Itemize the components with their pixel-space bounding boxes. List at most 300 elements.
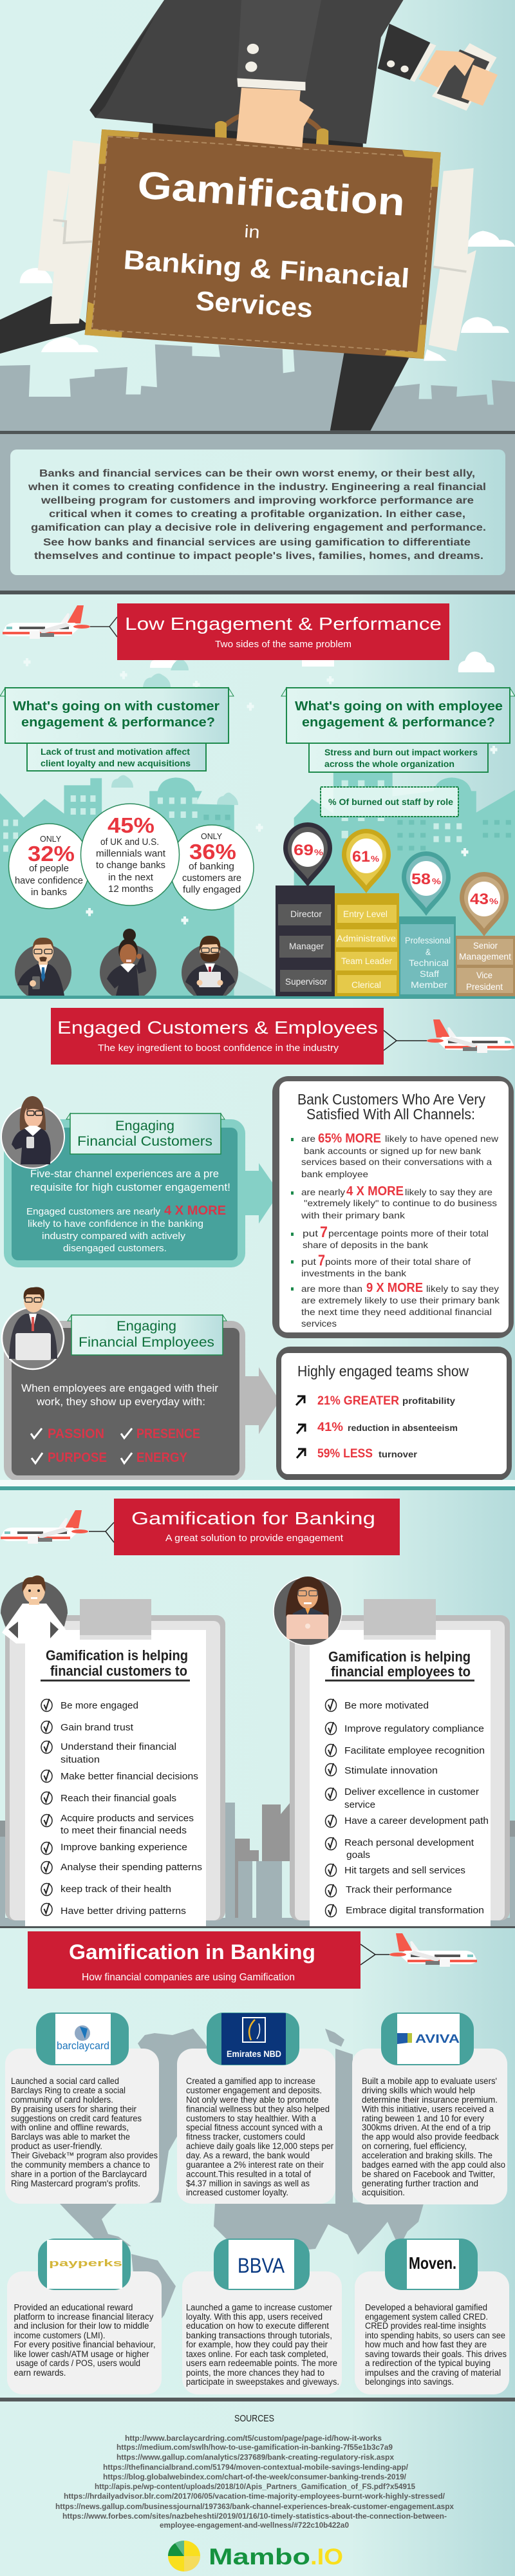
background: hero sky <box>0 0 515 451</box>
bar: professional 58%: Professional <box>405 935 451 945</box>
panel: engaging customers: industry compared with actively <box>42 1231 186 1242</box>
card: Aviva: 300kms driven. At the end of a trip <box>362 2123 491 2132</box>
card: PayPerks: earn rewards. <box>14 2368 66 2378</box>
panel: bank customers satisfied: investments in the bank <box>301 1268 407 1278</box>
panel: highly engaged teams: 21% GREATER <box>317 1394 399 1408</box>
bar: directors 69%: Manager <box>289 941 324 951</box>
card: Aviva: With this initiative, users received a <box>362 2105 494 2114</box>
card: Emirates NBD: customers to stay healthier. With a <box>186 2114 316 2123</box>
logo: Barclaycard <box>36 2012 129 2065</box>
card: BBVA: taxes online. For each task completed, <box>186 2349 328 2359</box>
card: Barclaycard: with online and offline rewards, <box>10 2123 129 2132</box>
person: bearded man with tablet <box>182 936 238 1001</box>
bar: senior 43%: Management <box>459 951 511 961</box>
clipboard: employees: Deliver excellence in customer <box>344 1786 479 1797</box>
card: Emirates NBD: increased customer loyalty. <box>186 2188 288 2197</box>
title box: engaging financial employees: Engaging <box>117 1319 176 1334</box>
panel: bank customers satisfied: are <box>301 1133 315 1144</box>
card: Moven <box>355 2271 509 2394</box>
title on briefcase: Services <box>195 285 314 323</box>
card: Barclaycard: product as user-friendly. <box>11 2141 102 2151</box>
intro text panel: critical when it comes to creating a profitable organization. In either case, <box>49 509 465 520</box>
card: Moven: Developed a behavioral gamified <box>365 2303 487 2312</box>
card: Aviva: acquisition. <box>362 2188 405 2197</box>
heading: Gamification in Banking <box>28 1931 360 1989</box>
card: PayPerks: usage of cards / POS, users would <box>16 2358 140 2368</box>
sources background <box>0 2401 515 2576</box>
card: Moven: how much and how fast they are <box>365 2340 487 2349</box>
clipboard: customers: situation <box>61 1754 100 1765</box>
panel: bank customers satisfied: likely to have opened new <box>385 1133 499 1144</box>
card: BBVA: for example, how they could pay their <box>186 2340 328 2349</box>
stat bubble: 45% <box>81 804 179 905</box>
clipboard: customers: keep track of their health <box>61 1884 171 1895</box>
card: PayPerks: like lower cash/ATM usage or higher <box>14 2349 149 2359</box>
clipboard: employees: Be more motivated <box>344 1700 429 1711</box>
card: BBVA: banking transactions through tutorials, <box>186 2331 332 2340</box>
card: PayPerks <box>7 2271 162 2394</box>
divider line <box>0 591 515 594</box>
heading: Engaged Customers & Employees <box>51 1008 384 1065</box>
panel: bank customers satisfied: the next time they need additional financial <box>301 1307 492 1317</box>
logo: PayPerks <box>38 2239 131 2290</box>
card: PayPerks: For every positive financial behaviour, <box>14 2340 156 2349</box>
pin: 58% <box>402 851 451 916</box>
callout: burned out label <box>321 787 458 817</box>
title box: engaging financial employees: Financial Employees <box>79 1335 214 1350</box>
airplane 2 <box>427 1019 514 1053</box>
panel: engaging employees: work, they show up everyday with: <box>36 1396 205 1408</box>
logo: BBVA <box>214 2239 310 2290</box>
panel: employee question: What's going on with employee <box>295 699 503 714</box>
bar: directors 69%: Supervisor <box>285 976 327 987</box>
heading: Gamification in Banking: Gamification in Banking <box>69 1940 315 1964</box>
bar: directors 69% <box>276 886 335 996</box>
panel: highly engaged teams: reduction in absenteeism <box>348 1423 458 1433</box>
background city section 3 <box>0 1803 515 1926</box>
card: Barclaycard: suggestions on credit card features <box>11 2114 142 2123</box>
stat bubble: 32% <box>9 824 90 909</box>
panel: highly engaged teams: 59% LESS <box>317 1447 373 1461</box>
sources list: https://medium.com/swlh/how-to-use-gamification-in-banking-7f55e1b3c7a9 <box>117 2443 393 2452</box>
panel: bank customers satisfied: with their primary bank <box>301 1210 406 1220</box>
logo: Emirates NBD: Emirates NBD <box>227 2049 281 2059</box>
pin: 43%: % <box>489 896 499 906</box>
stat bubble: 45%: in the next <box>108 872 154 883</box>
pin: 69%: 69 <box>294 842 314 859</box>
divider line <box>0 2398 515 2401</box>
title on briefcase <box>122 163 411 323</box>
title on briefcase: in <box>244 222 261 242</box>
card: BBVA: points, the more chances they had to <box>186 2368 324 2378</box>
title box: engaging financial customers: Financial Customers <box>77 1134 212 1149</box>
heading: Gamification for Banking <box>114 1499 400 1555</box>
title on briefcase: Banking & Financial <box>122 244 411 294</box>
section 1 background <box>0 594 515 999</box>
card: Emirates NBD: financial wellness but they also helped <box>186 2105 330 2114</box>
section 2 background <box>0 999 515 1480</box>
card: Aviva: generating further traction and <box>362 2179 478 2188</box>
card: Aviva: determine their insurance premium. <box>362 2095 498 2105</box>
bar: staff 61%: Clerical <box>351 980 381 990</box>
card: Aviva: badges earned with the app could also <box>362 2160 505 2170</box>
stat bubble: 36%: of banking <box>189 861 234 872</box>
panel: highly engaged teams: turnover <box>379 1449 418 1459</box>
card: Barclaycard: community of card holders. <box>11 2095 113 2105</box>
panel: bank customers satisfied: 9 X MORE <box>366 1281 423 1295</box>
bar: directors 69%: Director <box>290 909 322 919</box>
card: Moven: engagement system called CRED. <box>365 2312 488 2322</box>
logo: Mambo.IO: .IO <box>310 2544 343 2570</box>
sources heading: SOURCES <box>234 2413 274 2424</box>
sources list: http://www.barclaycardring.com/t5/custom/page/page-id/how-it-works <box>125 2434 382 2443</box>
pin: 58%: 58 <box>411 871 431 888</box>
section 3 background <box>0 1490 515 1928</box>
logo: BBVA: BBVA <box>238 2254 285 2277</box>
card: Emirates NBD: achieve daily goals like 12,000 steps per <box>186 2141 333 2151</box>
ground line 3 <box>0 1926 515 1928</box>
card: Emirates NBD: account.This resulted in a total of <box>186 2169 311 2179</box>
panel: bank customers satisfied: 4 X MORE <box>346 1184 404 1198</box>
pin: 69% <box>283 822 332 887</box>
heading: Engaged Customers & Employees: Engaged Customers & Employees <box>57 1018 378 1037</box>
airplane 1 <box>3 605 90 639</box>
heading: Low Engagement & Performance: Low Engagement & Performance <box>125 614 442 634</box>
person: man with phone <box>15 938 71 1001</box>
sources list: https://thefinancialbrand.com/51794/moven-contextual-mobile-savings-lending-app/ <box>103 2463 409 2472</box>
clipboard: employees: Gamification is helping <box>328 1649 471 1665</box>
subheading: stress: Stress and burn out impact workers <box>324 748 478 757</box>
stat bubble: 32%: in banks <box>31 887 67 898</box>
bar: professional 58%: Staff <box>420 969 439 979</box>
teal divider <box>0 1486 515 1490</box>
avatar: woman with laptop <box>274 1577 342 1645</box>
panel: engaging employees: PASSION <box>48 1426 104 1441</box>
stat bubble: 45%: of UK and U.S. <box>100 837 159 848</box>
title box: engaging financial customers: Engaging <box>115 1119 174 1133</box>
panel: engaging customers: 4 X MORE <box>164 1204 226 1218</box>
ground band <box>0 996 515 999</box>
clipboard: customers: Improve banking experience <box>61 1842 187 1853</box>
card: Emirates NBD: Not only were they able to promote <box>186 2095 319 2105</box>
card: Barclaycard <box>5 2049 159 2204</box>
panel: bank customers satisfied: put <box>301 1256 316 1267</box>
heading: Gamification in Banking: How financial companies are using Gamification <box>82 1972 295 1983</box>
clipboard: employees: Facilitate employee recognition <box>344 1745 485 1756</box>
subheading: trust: client loyalty and new acquisitions <box>41 759 191 768</box>
panel: bank customers satisfied: are more than <box>301 1283 362 1294</box>
panel: bank customers satisfied: "extremely likely" to continue to do business <box>304 1198 497 1208</box>
panel: bank customers satisfied: Satisfied With All Channels: <box>306 1106 475 1122</box>
clipboard: customers: Gamification is helping <box>46 1647 188 1663</box>
panel: engaging customers: disengaged customers. <box>63 1243 167 1254</box>
avatar: man in white shirt <box>1 1575 68 1643</box>
panel: bank customers satisfied: services <box>301 1318 337 1329</box>
callout: burned out label: % Of burned out staff by role <box>328 797 453 807</box>
clipboard: employees: Hit targets and sell services <box>344 1865 465 1876</box>
bar: professional 58%: Member <box>411 980 447 990</box>
bar: professional 58%: & <box>426 947 431 957</box>
sources list: https://www.forbes.com/sites/nazbeheshti/2019/01/16/10-timely-statistics-about-the-connection-between- <box>62 2512 447 2521</box>
card: Aviva: driving skills which would help <box>362 2085 475 2096</box>
card: Barclaycard: Ring Mastercard program's profits. <box>11 2179 140 2188</box>
card: Aviva: be shared on Facebook and Twitter, <box>362 2169 495 2179</box>
clipboard: employees: Track their performance <box>346 1884 452 1895</box>
stat bubble: 45%: to change banks <box>96 860 165 871</box>
sources list <box>55 2434 454 2530</box>
card: BBVA <box>182 2271 342 2394</box>
stat bubble: 45%: 45% <box>108 813 154 837</box>
pin: 61% <box>342 829 391 893</box>
bar: professional 58% <box>399 916 456 996</box>
panel: employee question: engagement & performance? <box>302 715 495 730</box>
clipboard: employees: Stimulate innovation <box>344 1765 438 1776</box>
heading: Low Engagement & Performance: Two sides of the same problem <box>215 639 351 650</box>
logo: Aviva <box>381 2012 474 2065</box>
card: Emirates NBD: fitness tracker, customers could <box>186 2132 305 2142</box>
bar: senior 43%: President <box>466 981 503 992</box>
logo: Moven: Moven. <box>409 2253 456 2273</box>
bar: senior 43%: Vice <box>476 970 492 980</box>
intro text panel: Banks and financial services can be their own worst enemy, or their best ally, <box>39 468 475 479</box>
clipboard: customers: financial customers to <box>50 1663 187 1679</box>
card: Barclaycard: Launched a social card called <box>11 2076 119 2086</box>
pin: 43% <box>460 872 509 936</box>
panel: highly engaged teams: Highly engaged teams show <box>297 1363 469 1379</box>
stat bubble: 32%: ONLY <box>40 834 61 844</box>
bar: staff 61%: Entry Level <box>343 909 388 919</box>
bar: senior 43% <box>456 936 515 996</box>
bar: professional 58%: Technical <box>409 958 449 968</box>
clipboard: customers: Be more engaged <box>61 1700 138 1711</box>
section 4 background <box>0 1928 515 2398</box>
panel: bank customers satisfied: points more of their total share of <box>325 1256 471 1267</box>
logo: Mambo.IO: Mambo <box>209 2544 310 2570</box>
sources list: https://news.gallup.com/businessjournal/197363/bank-channel-experiences-break-customer-engagement.aspx <box>55 2502 454 2511</box>
subheading: stress: across the whole organization <box>324 759 454 769</box>
clipboard: customers: Understand their financial <box>61 1741 176 1752</box>
panel: highly engaged teams: profitability <box>402 1396 455 1406</box>
airplane 3 <box>1 1510 88 1544</box>
sources list: https://www.gallup.com/analytics/237689/bank-creating-regulatory-risk.aspx <box>117 2452 394 2461</box>
card: Moven: CRED provides real-time insights <box>365 2321 486 2331</box>
sources list: https://hrdailyadvisor.blr.com/2017/06/05/vacation-time-majority-employees-burnt-work-highly-stressed/ <box>64 2492 445 2501</box>
panel: engaging customers: Five-star channel experiences are a pre <box>30 1168 219 1180</box>
clipboard: customers: Have better driving patterns <box>61 1906 186 1917</box>
panel: bank customers satisfied: likely to say they are <box>405 1187 492 1197</box>
title on briefcase: Gamification <box>136 163 406 224</box>
panel: bank customers satisfied: Bank Customers Who Are Very <box>297 1091 485 1108</box>
avatar: woman customer <box>1 1096 64 1168</box>
heading: Engaged Customers & Employees: The key ingredient to boost confidence in the industry <box>98 1043 339 1054</box>
clipboard: customers: Reach their financial goals <box>61 1793 176 1804</box>
intro text panel: themselves and continue to impact people's lives, families, homes, and dreams. <box>34 551 483 562</box>
card: Aviva: rating beween 1 and 10 for every <box>362 2114 484 2123</box>
card: Barclaycard: By praising users for sharing their <box>11 2105 136 2114</box>
clipboard: customers: Gain brand trust <box>61 1722 134 1733</box>
logo: Emirates NBD <box>207 2012 299 2065</box>
card: Aviva: Built a mobile app to evaluate users' <box>362 2076 497 2086</box>
connector 2 <box>384 1030 427 1050</box>
sparkles over city <box>86 746 497 925</box>
pin: 58%: % <box>432 876 442 886</box>
panel: bank customers satisfied: 7 <box>320 1224 328 1241</box>
panel: bank customers satisfied: share of deposits in the bank <box>303 1240 429 1250</box>
clipboard: employees: Embrace digital transformation <box>346 1905 484 1916</box>
panel: highly engaged teams <box>276 1347 512 1481</box>
card: Emirates NBD: special fitness account synced with a <box>186 2123 323 2132</box>
card: BBVA: education on how to execute different <box>186 2321 329 2331</box>
pin: 61%: % <box>371 854 379 864</box>
panel: customer question: What's going on with customer <box>13 699 220 714</box>
stat bubble: 45%: 12 months <box>108 884 153 895</box>
sources list: employee-engagement-and-wellness/#722c10b422a0 <box>160 2521 349 2530</box>
sources list: http://apis.pe/wp-content/uploads/2018/10/Apis_Partners_Gamification_of_FS.pdf?x54915 <box>95 2482 415 2491</box>
card: Emirates NBD <box>177 2049 335 2204</box>
panel: bank customers satisfied: bank accounts or signed up for new bank <box>304 1146 482 1156</box>
clipboard: employees: goals <box>346 1850 370 1861</box>
card: Moven: into spending habits, so users can see <box>365 2331 505 2340</box>
clipboard: customers: Analyse their spending patterns <box>61 1862 202 1873</box>
card: Emirates NBD: customer engagement and deposits. <box>186 2085 322 2096</box>
card: PayPerks: Provided an educational reward <box>14 2303 133 2312</box>
panel: engaging employees: When employees are engaged with their <box>21 1383 219 1394</box>
clipboard: employees: Improve regulatory compliance <box>344 1723 484 1734</box>
panel: engaging employees: ENERGY <box>136 1450 187 1465</box>
panel: engaging employees <box>4 1321 279 1481</box>
clipboard: employees: Reach personal development <box>344 1837 474 1848</box>
heading: Gamification for Banking: A great solution to provide engagement <box>165 1533 344 1544</box>
hero illustration: businessman with briefcase <box>0 0 515 434</box>
panel: employee question <box>281 688 515 743</box>
intro text panel: when it comes to creating confidence in the industry. Engineering a real financial <box>28 482 486 493</box>
title box: engaging financial customers <box>66 1113 225 1154</box>
panel: engaging customers: Engaged customers are nearly <box>26 1206 161 1217</box>
connector 1 <box>90 617 117 637</box>
heading: Low Engagement & Performance <box>117 603 449 660</box>
panel: bank customers satisfied: are nearly <box>301 1187 345 1197</box>
logo: Barclaycard: barclaycard <box>57 2040 109 2052</box>
card: BBVA: Launched a game to increase customer <box>186 2303 332 2312</box>
card: Barclaycard: share in a portion of the Barclaycard <box>11 2169 147 2179</box>
sources list: https://blog.globalwebindex.com/chart-of-the-week/consumer-banking-trends-2019/ <box>103 2472 407 2481</box>
heading: Gamification for Banking: Gamification for Banking <box>131 1508 375 1528</box>
panel: bank customers satisfied: are extremely likely to use their primary bank <box>301 1295 500 1305</box>
logo: Aviva: AVIVA <box>415 2032 460 2045</box>
panel: customer question <box>0 688 234 743</box>
card: Aviva: acceleration and braking skills. The <box>362 2151 492 2160</box>
intro text panel: See how banks and financial services are using gamification to differentiate <box>43 537 471 548</box>
panel: customer question: engagement & performance? <box>21 715 215 730</box>
panel: bank customers satisfied: likely to say they <box>426 1283 499 1294</box>
card: Moven: saving towards their goals. This drives <box>365 2349 507 2359</box>
bar: senior 43%: Senior <box>473 940 498 951</box>
city background left <box>0 777 276 996</box>
world map <box>60 2029 424 2331</box>
pin: 43%: 43 <box>470 891 489 908</box>
card: BBVA: loyalty. With this app, users received <box>186 2312 323 2322</box>
panel: bank customers satisfied: percentage points more of their total <box>328 1228 489 1238</box>
clipboard: employees: Have a career development path <box>344 1815 489 1826</box>
panel: bank customers satisfied: 65% MORE <box>318 1132 381 1146</box>
stat bubble: 45%: millennials want <box>96 848 166 859</box>
panel: engaging customers <box>4 1119 279 1267</box>
panel: engaging customers: likely to have confidence in the banking <box>28 1218 203 1229</box>
ground line <box>0 431 515 434</box>
card: Emirates NBD: day. As a reward, the bank would <box>186 2151 310 2160</box>
panel: engaging customers: requisite for high customer engagement! <box>30 1182 230 1193</box>
card: PayPerks: platform to increase financial literacy <box>14 2312 154 2322</box>
card: Aviva: the app would also provide feedback <box>362 2132 499 2142</box>
card: Aviva: on cornering, fuel efficiency, <box>362 2141 467 2151</box>
card: Barclaycard: Barclays Ring to create a social <box>11 2085 126 2096</box>
card: Moven: belongings into savings. <box>365 2377 454 2387</box>
connector 3 <box>89 1522 114 1542</box>
logo: PayPerks: payperks <box>49 2258 122 2269</box>
clipboard: employees: financial employees to <box>331 1663 471 1680</box>
title box: engaging financial employees <box>68 1315 227 1355</box>
panel: bank customers satisfied: services based on their conversations with a <box>301 1157 492 1167</box>
clipboard: customers: to meet their financial needs <box>61 1825 187 1836</box>
intro text panel <box>10 450 505 575</box>
card: PayPerks: and inclusion for their low to middle <box>14 2321 149 2331</box>
card: Emirates NBD: $4.37 million in savings as well as <box>186 2179 310 2188</box>
intro text panel: gamification can play a decisive role in delivering engagement and performance. <box>31 522 486 533</box>
card: Moven: a redirection of the typical buying <box>365 2358 491 2368</box>
stat bubble: 32%: 32% <box>28 842 75 866</box>
connector 4 <box>360 1944 389 1965</box>
bar: staff 61% <box>335 893 399 996</box>
stat bubble: 36%: customers are <box>182 873 241 884</box>
stat bubble: 36%: fully engaged <box>183 884 241 895</box>
stat bubble: 32%: have confidence <box>15 875 83 886</box>
stat bubble: 32%: of people <box>29 863 69 874</box>
clipboard: customers: Acquire products and services <box>61 1813 194 1824</box>
panel: highly engaged teams: 41% <box>317 1421 343 1434</box>
intro text panel: wellbeing program for customers and improving workforce performance are <box>41 495 474 506</box>
panel: bank customers satisfied <box>272 1076 514 1338</box>
card: Barclaycard: Barclays was able to market the <box>11 2132 130 2142</box>
city background right <box>294 773 515 996</box>
card: PayPerks: income customers (LMI). <box>14 2331 106 2340</box>
clipboard: customers: Make better financial decisions <box>61 1771 198 1782</box>
band between sections <box>0 1480 515 1486</box>
clipboard: employees <box>290 1599 510 1926</box>
card: Emirates NBD: Created a gamified app to increase <box>186 2076 315 2086</box>
subheading: trust: Lack of trust and motivation affect <box>41 747 191 757</box>
intro background band <box>0 434 515 591</box>
panel: bank customers satisfied: put <box>303 1228 318 1238</box>
person: woman with phone <box>100 929 156 1001</box>
panel: bank customers satisfied: bank employee <box>301 1169 368 1179</box>
clipboard: employees: service <box>344 1799 375 1810</box>
subheading: stress <box>309 743 488 772</box>
clipboard: customers <box>5 1599 225 1926</box>
subheading: trust <box>27 743 206 771</box>
panel: bank customers satisfied: 7 <box>318 1252 325 1269</box>
card: Barclaycard: the community members a chance to <box>11 2160 150 2170</box>
decorative clouds and sparkles <box>23 652 494 805</box>
card: Moven: impulses and the craving of material <box>365 2368 501 2378</box>
stat bubble: 36% <box>170 825 254 910</box>
logo: Moven <box>385 2239 478 2290</box>
panel: engaging employees: PRESENCE <box>136 1426 200 1441</box>
card: Emirates NBD: guarantee a 2% interest rate on their <box>186 2160 324 2170</box>
stat bubble: 36%: 36% <box>189 840 236 864</box>
airplane 4 <box>389 1933 477 1967</box>
card: Aviva <box>352 2049 507 2204</box>
stat bubble: 36%: ONLY <box>201 831 222 841</box>
